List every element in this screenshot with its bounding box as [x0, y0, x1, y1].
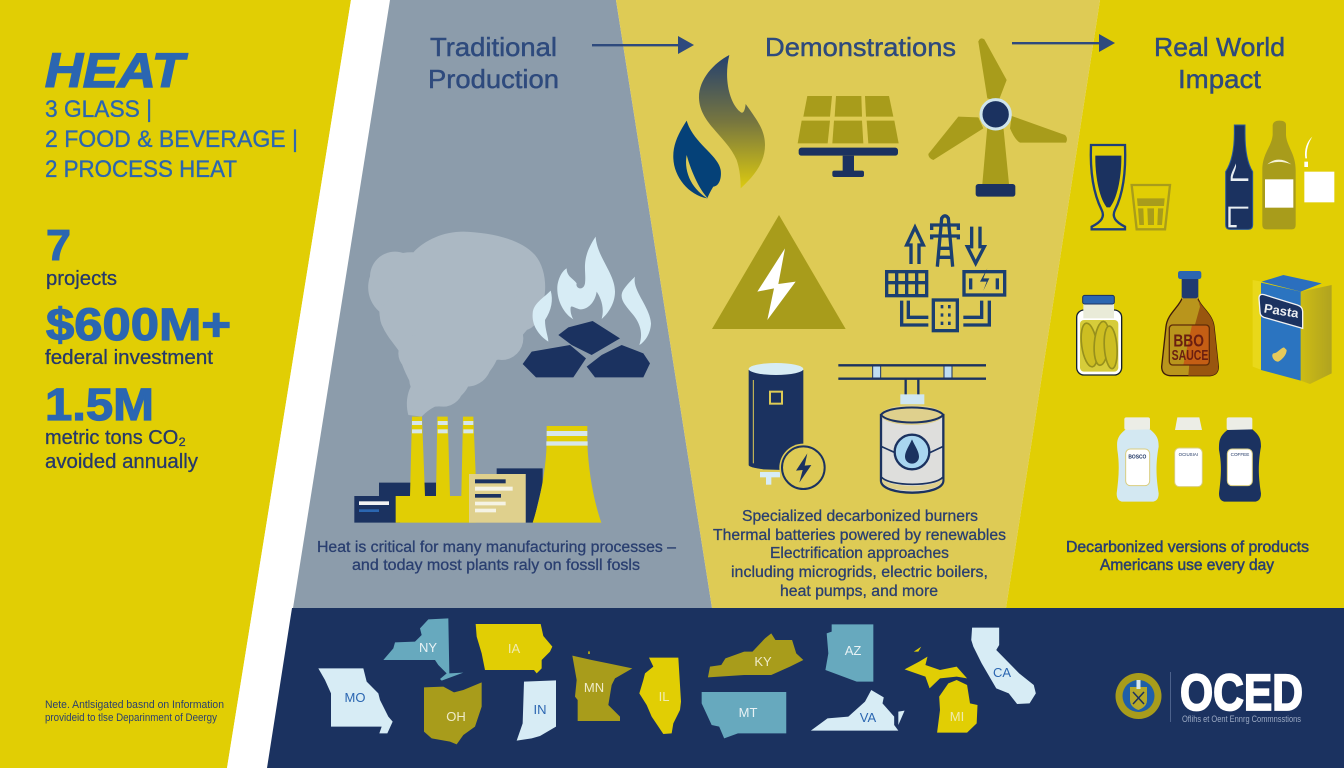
state: IA	[476, 624, 552, 673]
state: VA	[811, 690, 905, 731]
text: impact description	[1066, 539, 1309, 574]
state: MI	[905, 647, 978, 733]
logo: OCED: OCED	[1180, 664, 1303, 721]
heading: real world impact: Impact	[1178, 64, 1262, 94]
text: heat description: and today most plants raly on fossll fosls	[352, 557, 640, 574]
heading: real world impact: Real World	[1154, 32, 1285, 62]
icon: pasta box	[1253, 275, 1332, 384]
state: VA: VA	[860, 710, 877, 725]
state: IN	[517, 680, 556, 741]
stat: CO2 avoided: 1.5M	[45, 379, 154, 430]
title: HEAT: HEAT	[45, 45, 188, 98]
panel: demonstrations	[616, 0, 1100, 608]
icon: microgrid	[887, 216, 1005, 331]
text: demonstrations list: Specialized decarbonized burners	[742, 508, 978, 525]
icon: bbq sauce bottle: BBO	[1173, 331, 1204, 351]
state: CA: CA	[993, 665, 1011, 680]
state: MT: MT	[739, 705, 757, 720]
state: MN	[572, 651, 632, 721]
text: demonstrations list: Thermal batteries powered by renewables	[713, 527, 1006, 544]
logo: OCED: Oflihs et Oent Ennrg Commnsstions	[1182, 714, 1301, 724]
icon: wind turbine	[928, 38, 1067, 197]
sector list: 2 FOOD & BEVERAGE |	[45, 126, 298, 153]
state: NY: NY	[419, 640, 437, 655]
heading: demonstrations: Demonstrations	[765, 32, 956, 62]
stat: projects: projects	[46, 268, 117, 290]
stat: CO2 avoided: metric tons CO₂	[45, 427, 186, 449]
panel: states and logo	[267, 608, 1344, 768]
icon: pasta box: Pasta	[1263, 301, 1301, 321]
state: NY	[383, 618, 463, 681]
state: IN: IN	[534, 702, 546, 717]
sector list: 2 PROCESS HEAT	[45, 156, 237, 183]
stat: federal investment: $600M+	[46, 299, 231, 350]
stat: federal investment	[45, 299, 231, 369]
stat: projects: 7	[46, 221, 71, 270]
footnote	[45, 699, 224, 724]
state: IL	[639, 658, 681, 734]
icon: bbq sauce bottle	[1162, 271, 1218, 376]
heading: traditional production: Production	[428, 64, 559, 94]
state: MN: MN	[584, 680, 604, 695]
icon: solar panel	[798, 96, 899, 177]
stat: CO2 avoided: avoided annually	[45, 451, 198, 473]
state: IL: IL	[659, 689, 669, 704]
icon: squeeze bottles: COFFEE	[1231, 452, 1250, 458]
text: demonstrations list: including microgrids, electric boilers,	[731, 564, 988, 581]
state: OH: OH	[446, 709, 466, 724]
icon: squeeze bottles: BOSCO	[1128, 454, 1147, 460]
icon: coal	[523, 321, 650, 377]
icon: factory	[354, 417, 601, 523]
state: AZ: AZ	[845, 643, 861, 658]
icon: thermal battery tank	[749, 363, 827, 492]
state: MO	[318, 668, 393, 733]
heading: real world impact	[1154, 32, 1285, 94]
heading: traditional production	[428, 32, 559, 94]
icon: bbq sauce bottle: SAUCE	[1172, 348, 1208, 364]
icon: piped boiler tank	[838, 365, 986, 493]
text: demonstrations list: heat pumps, and more	[780, 583, 938, 600]
state: KY: KY	[754, 654, 772, 669]
state: MT	[702, 692, 786, 738]
state: CA	[971, 628, 1036, 704]
panel: real world impact	[1006, 0, 1344, 608]
icon: tumbler glass	[1132, 185, 1170, 229]
state: MO: MO	[345, 690, 365, 705]
text: demonstrations list	[713, 508, 1006, 600]
icon: squeeze bottles	[1117, 417, 1261, 502]
state: OH	[424, 682, 482, 744]
icon: electricity triangle	[712, 215, 846, 329]
icon: glass bottles	[1226, 121, 1334, 229]
state: IA: IA	[508, 641, 520, 656]
state: AZ	[825, 624, 873, 682]
text: demonstrations list: Electrification approaches	[770, 545, 949, 562]
text: impact description: Decarbonized versions of products	[1066, 539, 1309, 556]
icon: flames	[533, 237, 651, 345]
footnote: provideid to tlse Deparinment of Deergy	[45, 712, 217, 724]
stat: projects	[46, 221, 117, 290]
state: MI: MI	[950, 709, 964, 724]
icon: goblet glass	[1091, 145, 1125, 229]
stat: CO2 avoided	[45, 379, 198, 473]
text: impact description: Americans use every day	[1100, 557, 1274, 574]
panel: left stats	[0, 0, 351, 768]
state: KY	[708, 633, 803, 677]
text: heat description: Heat is critical for many manufacturing processes –	[317, 539, 676, 556]
footnote: Nete. Antlsigated basnd on Information	[45, 699, 224, 711]
arrow: demonstrations to impact	[1012, 34, 1115, 52]
text: heat description	[317, 539, 676, 574]
panel: traditional production	[293, 0, 712, 608]
sector list: 3 GLASS |	[45, 96, 152, 123]
icon: smoke cloud	[368, 232, 545, 417]
icon: pickle jar	[1077, 295, 1122, 375]
arrow: traditional to demonstrations	[592, 36, 694, 54]
icon: department seal	[1116, 673, 1162, 719]
stat: federal investment: federal investment	[45, 347, 213, 369]
sector list	[45, 96, 298, 183]
icon: squeeze bottles: OCIUSIAI	[1179, 452, 1198, 458]
icon: gradient flame	[673, 55, 765, 199]
logo: OCED	[1116, 664, 1303, 724]
heading: traditional production: Traditional	[430, 32, 557, 62]
